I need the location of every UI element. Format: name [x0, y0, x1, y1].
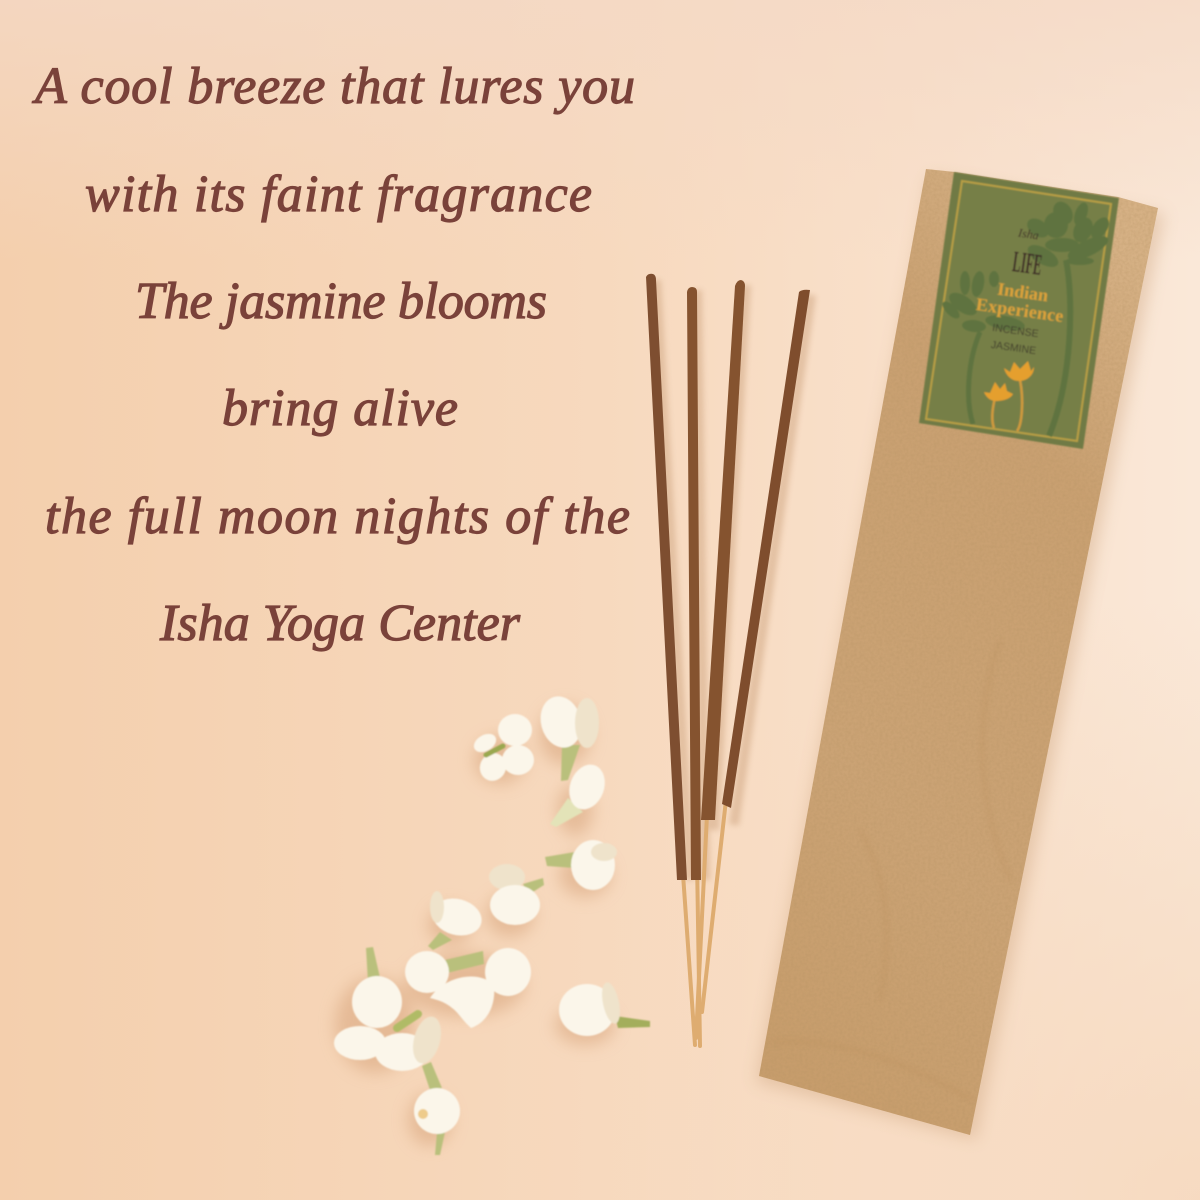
label product name: [990, 322, 1039, 357]
label title: Experience: [975, 294, 1065, 326]
flower: lower right: [559, 981, 650, 1036]
flower: top bud: [535, 692, 599, 781]
flower: large left bud: [352, 947, 402, 1028]
poem text: the full moon nights of the: [45, 488, 630, 545]
label title: Indian: [996, 279, 1050, 306]
poem text: A cool breeze that lures you: [32, 58, 635, 115]
poem text: Isha Yoga Center: [159, 595, 521, 652]
flower: leaning bud: [550, 760, 611, 827]
poem text: with its faint fragrance: [85, 166, 592, 223]
incense sticks: [646, 274, 811, 1046]
flower: horizontal bud: [405, 951, 484, 993]
flower: left cluster top: [428, 891, 486, 950]
small lotus: [940, 270, 1026, 424]
brand logo: [1011, 226, 1044, 282]
bag creases: [772, 640, 1010, 1100]
flower: bottom bud: [414, 1062, 460, 1155]
green product label: [919, 172, 1119, 449]
label title: [975, 279, 1065, 326]
flower: bell: [430, 976, 494, 1028]
green product label: LIFE: [1011, 245, 1044, 282]
flower shadows: [335, 705, 615, 1146]
flower: right open: [545, 840, 617, 890]
coated stick 3: [701, 280, 745, 820]
jasmine flowers: [334, 692, 650, 1155]
coated stick 4: [722, 290, 810, 808]
poem text: The jasmine blooms: [135, 273, 547, 330]
incense packet: [756, 169, 1164, 1140]
bare bamboo tips: [682, 800, 726, 1046]
coated stick 2: [687, 287, 701, 880]
stick shadows: [656, 280, 811, 880]
flower: four petal: [471, 714, 534, 785]
flower: wide open lower: [334, 1013, 446, 1071]
kraft paper bag: [759, 169, 1158, 1135]
packet shadow: [756, 176, 1164, 1140]
flower: middle open: [489, 864, 544, 925]
coated stick 1: [646, 274, 687, 880]
label product name: INCENSE: [991, 322, 1039, 340]
flower: round bud: [485, 948, 531, 996]
poem text: bring alive: [222, 380, 458, 437]
large lotus: [1024, 198, 1113, 436]
poem text: [32, 58, 635, 652]
orange lotus pair: [984, 361, 1034, 431]
brand logo: Isha: [1016, 226, 1040, 242]
label product name: JASMINE: [990, 339, 1037, 357]
